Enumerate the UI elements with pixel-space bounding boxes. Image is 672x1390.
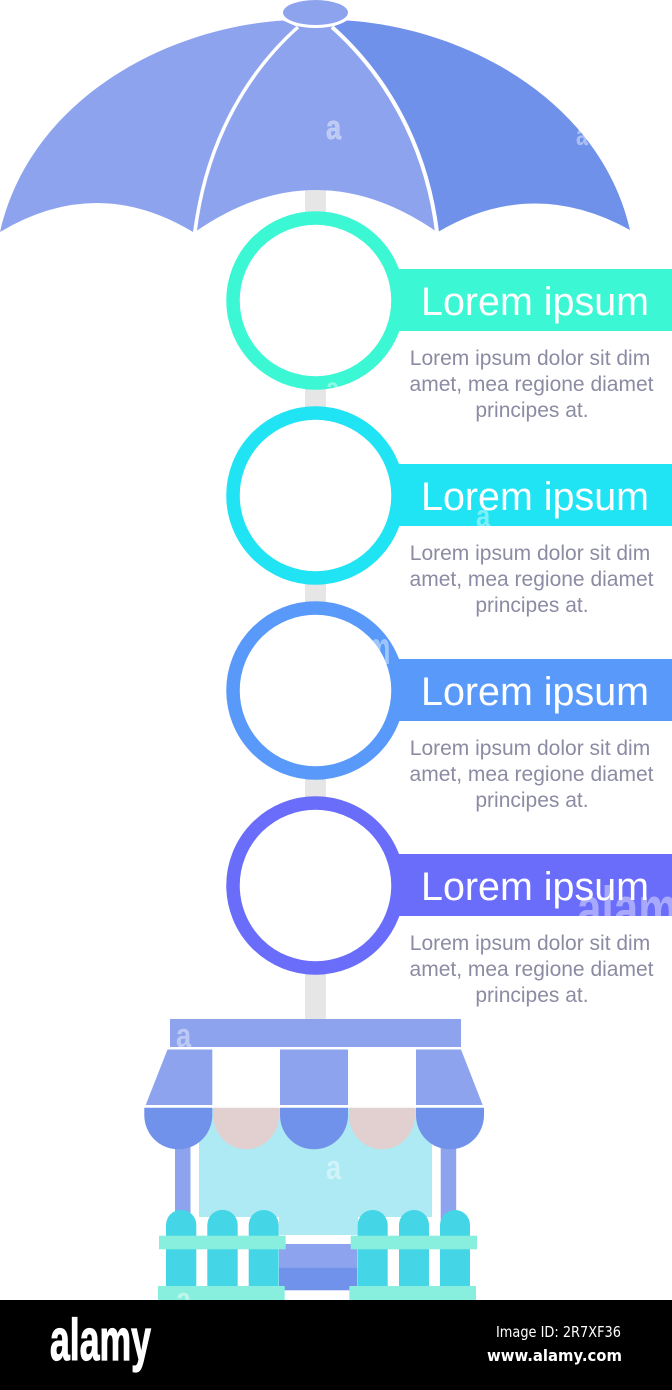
site url: www.alamy.com [487, 1346, 622, 1365]
ring 4 [233, 803, 398, 968]
watermark letter: a [476, 499, 491, 535]
banner 3 [385, 659, 672, 721]
heading 2: Lorem ipsum [421, 475, 649, 519]
step 2 [233, 413, 672, 617]
ring 3 [233, 608, 398, 773]
right column [441, 1140, 456, 1220]
description 3: Lorem ipsum dolor sit dim [410, 737, 650, 760]
banner 2 [385, 464, 672, 526]
watermark letter: a [176, 1016, 192, 1055]
left upper rail [159, 1236, 286, 1249]
heading 3: Lorem ipsum [421, 670, 649, 714]
ring 1 [233, 218, 398, 383]
description 4: Lorem ipsum dolor sit dim [410, 932, 650, 955]
scallop 3 [280, 1108, 348, 1149]
footer bar [0, 1300, 672, 1390]
scallop 4 [349, 1108, 415, 1149]
right upper rail [351, 1236, 477, 1249]
scallop 1 [144, 1108, 212, 1149]
awning stripe left [146, 1050, 212, 1105]
description 4: amet, mea regione diamet [410, 958, 654, 981]
left fence posts [166, 1210, 279, 1286]
description 1: principes at. [475, 399, 589, 422]
awning stripe right [416, 1050, 483, 1105]
upper step [279, 1244, 357, 1267]
description 2: principes at. [475, 594, 589, 617]
description 1: amet, mea regione diamet [410, 373, 654, 396]
description 2: amet, mea regione diamet [410, 568, 654, 591]
watermark letter: a [576, 117, 588, 152]
step 3 [233, 608, 672, 812]
image id: Image ID: 2R7XF36 [496, 1323, 621, 1341]
right panel [332, 20, 630, 232]
ring 2 [233, 413, 398, 578]
watermark letter: a [176, 1280, 192, 1319]
description 3: amet, mea regione diamet [410, 763, 654, 786]
steps [279, 1244, 357, 1290]
pole [305, 185, 326, 1020]
watermark bars: m [366, 624, 391, 675]
right lower rail [349, 1286, 476, 1300]
roof bar [170, 1019, 461, 1047]
step 1 [233, 218, 672, 422]
description 1: Lorem ipsum dolor sit dim [410, 347, 650, 370]
center panel [195, 25, 437, 232]
heading 1: Lorem ipsum [421, 280, 649, 324]
description 2: Lorem ipsum dolor sit dim [410, 542, 650, 565]
right rib [332, 27, 437, 232]
awning stripe center [280, 1050, 348, 1105]
heading 4: Lorem ipsum [421, 865, 649, 909]
step 4 [233, 803, 672, 1007]
knob [283, 0, 348, 25]
window [199, 1108, 432, 1235]
knob outline [280, 0, 352, 28]
umbrella canopy [0, 0, 630, 232]
footer logo: alamy [50, 1308, 151, 1373]
description 3: principes at. [475, 789, 589, 812]
banner 4 [385, 854, 672, 916]
lower step [279, 1267, 357, 1290]
scallop 2 [213, 1108, 279, 1149]
banner 1 [385, 269, 672, 331]
left column [175, 1140, 190, 1220]
scallop 5 [416, 1108, 484, 1149]
watermark letter: a [326, 370, 340, 405]
description 4: principes at. [475, 984, 589, 1007]
right fence posts [358, 1210, 470, 1286]
left rib [195, 27, 298, 232]
left panel [0, 20, 298, 232]
left lower rail [158, 1286, 285, 1300]
watermark letter: a [326, 1148, 342, 1187]
watermark letter: a [326, 108, 342, 147]
shop illustration [144, 1016, 484, 1319]
